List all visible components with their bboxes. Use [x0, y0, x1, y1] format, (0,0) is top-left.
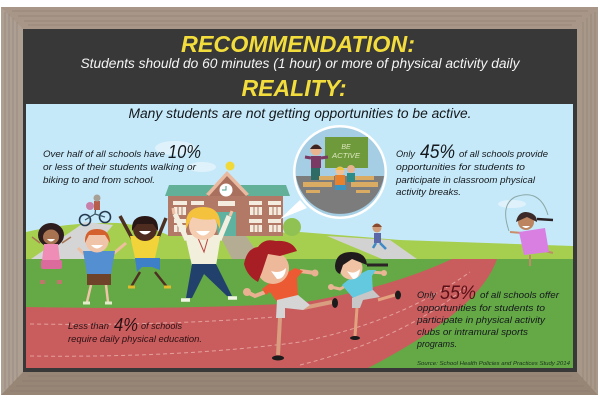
- school building: [165, 162, 301, 236]
- ground: [26, 259, 573, 368]
- chalkboard: [23, 29, 577, 372]
- stat: 10 percent: [43, 142, 201, 186]
- stat: 4 percent: require daily physical education.: [68, 334, 202, 345]
- paths: [31, 222, 113, 259]
- small child running: [372, 224, 386, 249]
- stat: 55 percent: Only: [417, 290, 437, 301]
- stat: 45 percent: participate in classroom physical: [395, 175, 536, 186]
- stat: 10 percent: biking to and from school.: [43, 175, 155, 186]
- stat: 55 percent: 55%: [440, 283, 476, 304]
- recommendation text: Students should do 60 minutes (1 hour) or more of physical activity daily: [80, 56, 521, 71]
- stat: 4 percent: [68, 315, 202, 345]
- stat: 45 percent: of all schools provide: [459, 149, 548, 160]
- stat: 55 percent: clubs or intramural sports: [417, 327, 528, 338]
- stat: 4 percent: 4%: [114, 315, 138, 335]
- child on bicycle: [80, 194, 110, 226]
- source: Source: School Health Policies and Practices Study 2014: [417, 361, 570, 367]
- stat: 55 percent: opportunities for students to: [417, 303, 545, 314]
- stat: 55 percent: of all schools offer: [480, 290, 560, 301]
- clouds: [155, 141, 526, 208]
- subtitle: many students: Many students are not getting opportunities to be active.: [128, 106, 472, 121]
- stat: 45 percent: 45%: [420, 142, 455, 163]
- stat: 55 percent: [416, 283, 560, 350]
- child: red hair: [78, 229, 126, 303]
- panel: scene: [26, 104, 573, 368]
- runner: red hair: [243, 240, 338, 360]
- runner: black pigtails: [328, 252, 401, 340]
- stat: 45 percent: activity breaks.: [396, 187, 461, 198]
- stat: 10 percent: or less of their students walking or: [43, 162, 197, 173]
- child: blond teacher with whistle: [173, 207, 237, 300]
- stat: 4 percent: Less than: [68, 321, 109, 332]
- stat: 45 percent: [395, 142, 548, 198]
- stat: 10 percent: Over half of all schools have: [43, 149, 165, 160]
- title: recommendation: RECOMMENDATION:: [181, 31, 415, 57]
- stat: 4 percent: of schools: [141, 321, 182, 332]
- chalkboard text: BE: [341, 144, 351, 151]
- child: pink dress: [32, 223, 71, 282]
- hills: [26, 223, 573, 300]
- student desks: [303, 176, 378, 193]
- teacher: [305, 144, 328, 180]
- stat: 10 percent: 10%: [168, 142, 201, 162]
- title: reality: REALITY:: [242, 75, 346, 101]
- students: [335, 165, 355, 190]
- stat: 45 percent: Only: [396, 149, 416, 160]
- classroom circle: [280, 125, 387, 219]
- child: jump rope: [506, 195, 553, 266]
- stat: 55 percent: participate in physical activity: [416, 315, 546, 326]
- classroom circle: ACTIVE: [331, 153, 360, 160]
- stat: 45 percent: opportunities for students to: [396, 162, 525, 173]
- child: dark skin yellow shirt: [120, 216, 171, 287]
- stat: 55 percent: programs.: [416, 339, 457, 350]
- track: [26, 259, 497, 368]
